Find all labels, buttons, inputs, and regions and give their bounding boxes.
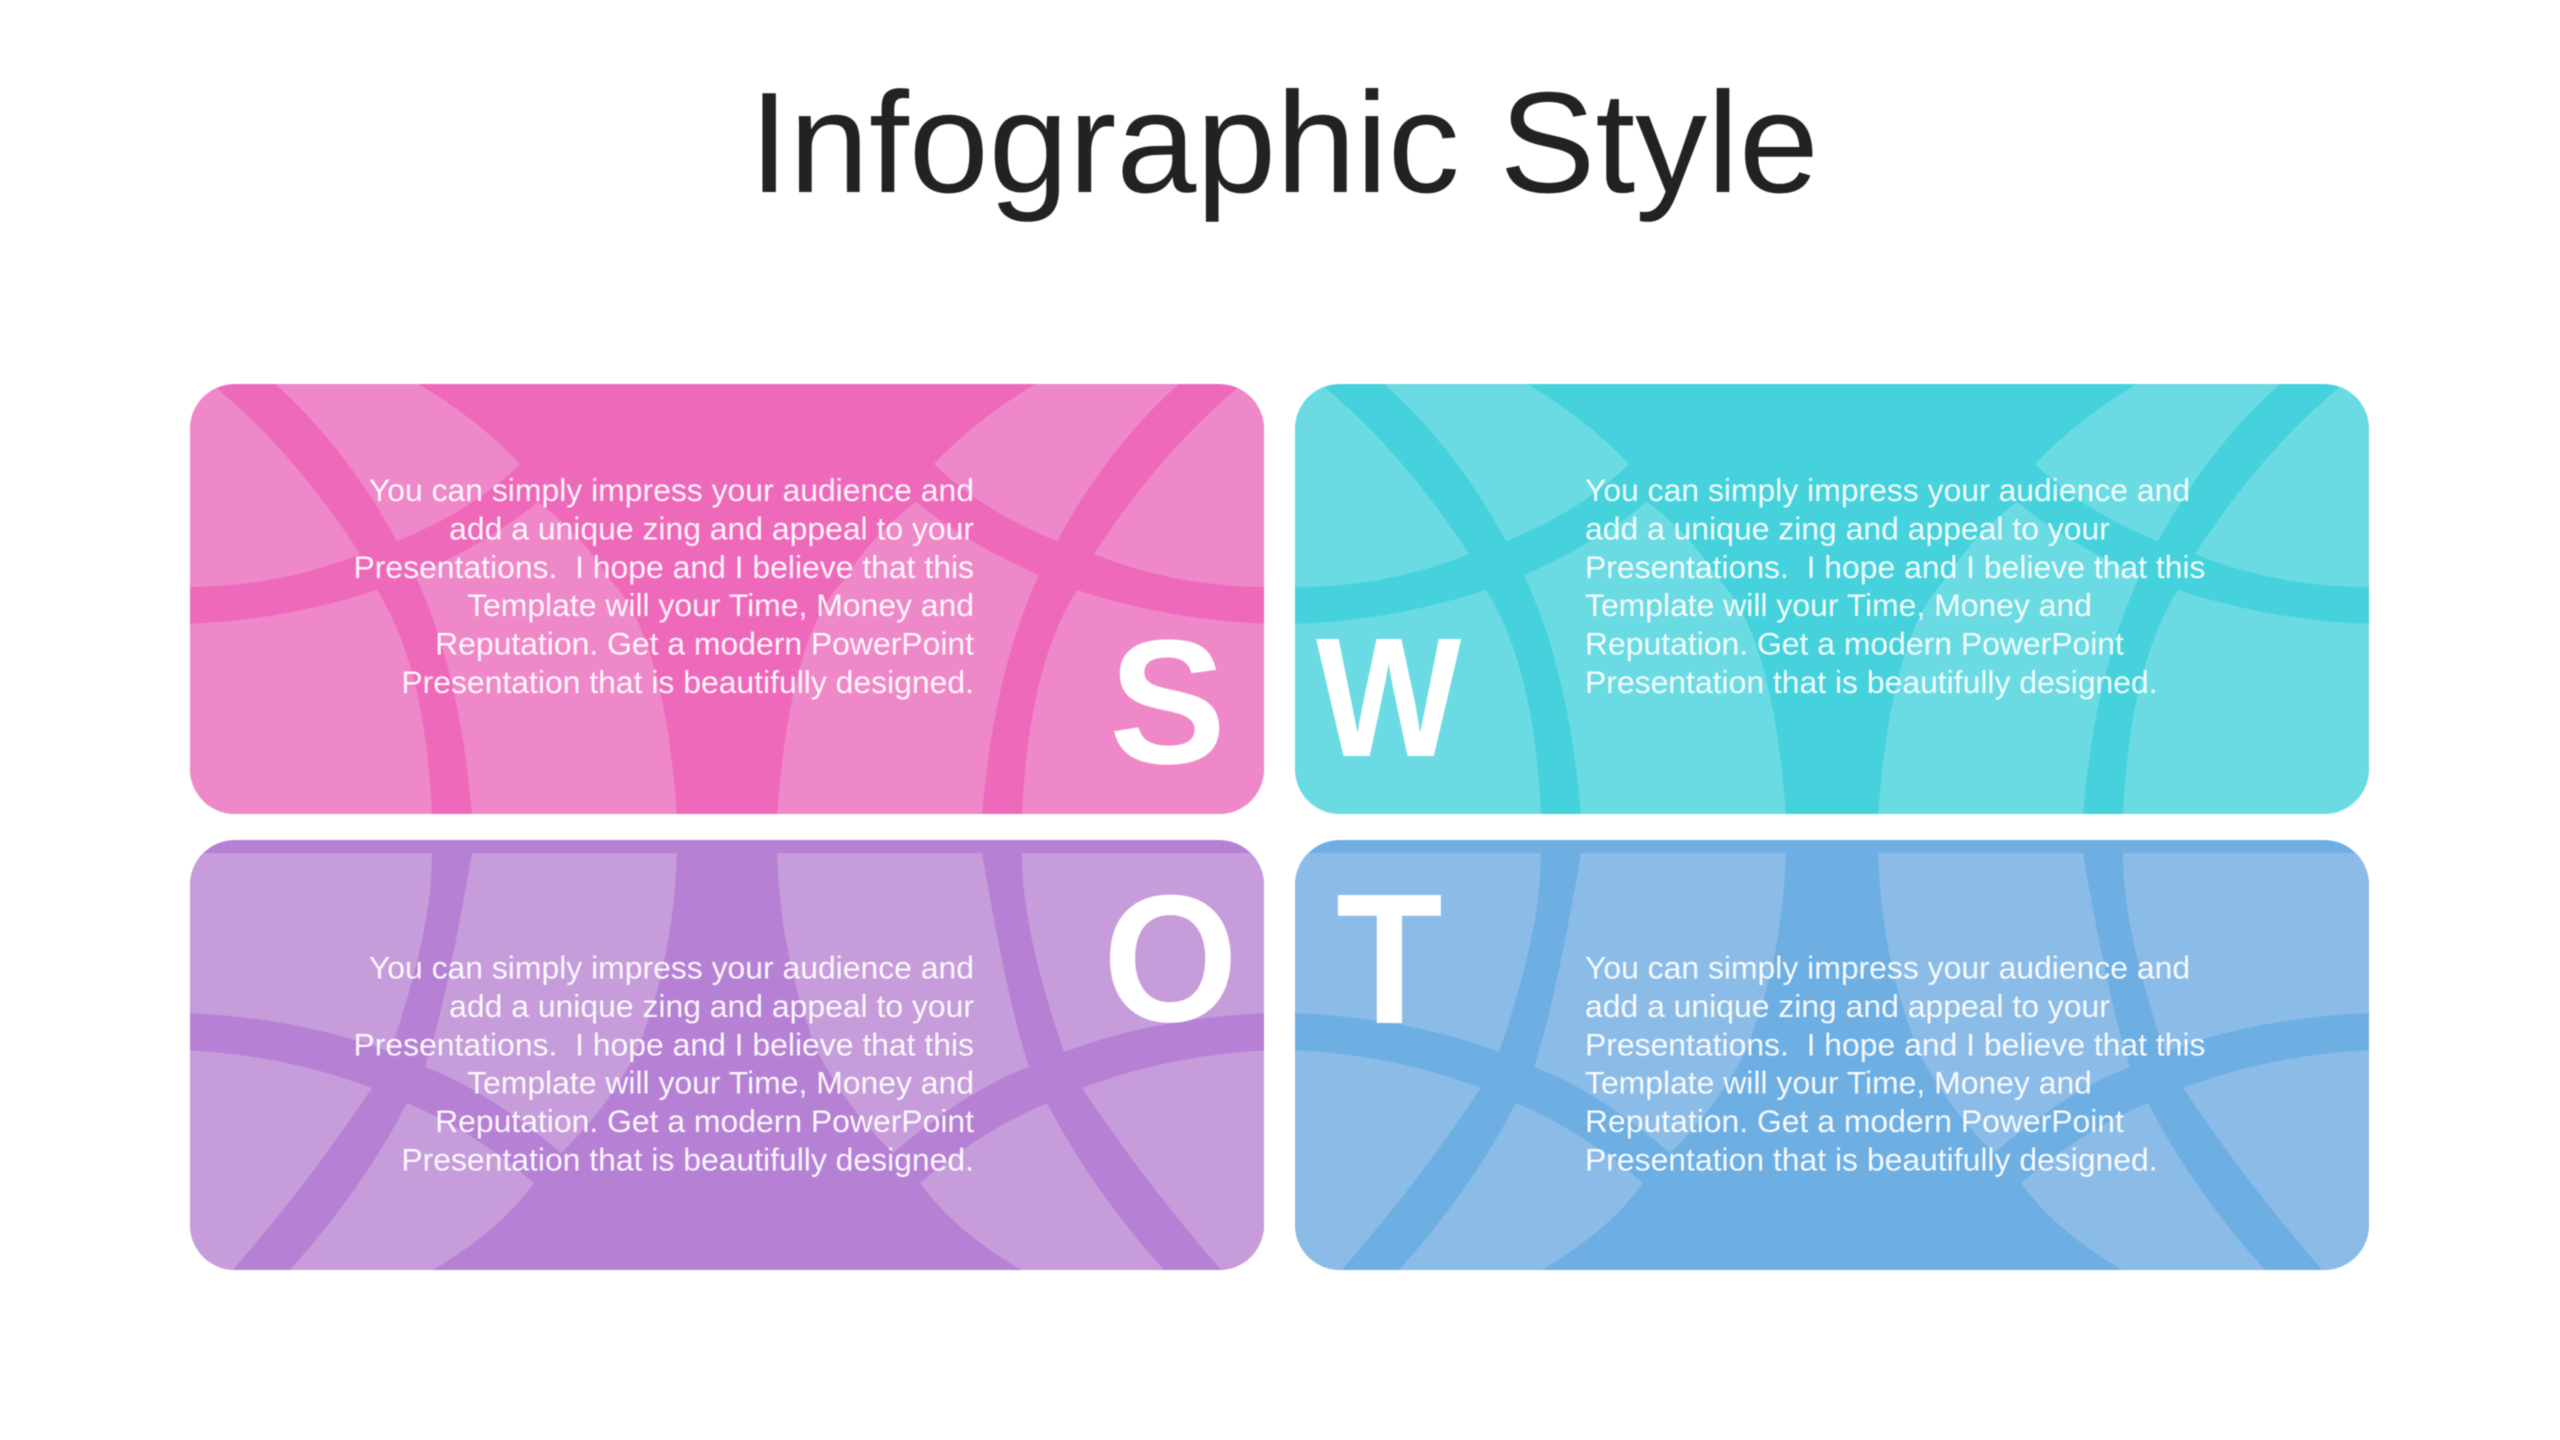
letter S: S	[1109, 604, 1226, 801]
body text T: You can simply impress your audience and	[1585, 950, 2190, 986]
panel: S strengths	[184, 382, 1270, 816]
body text S: Reputation. Get a modern PowerPoint	[435, 626, 974, 662]
body text T: add a unique zing and appeal to your	[1585, 988, 2110, 1024]
body text O: add a unique zing and appeal to your	[449, 988, 974, 1024]
body text O: Template will your Time, Money and	[467, 1065, 974, 1101]
body text S: Template will your Time, Money and	[467, 587, 974, 623]
body text S: Presentations. I hope and I believe that this	[354, 549, 974, 585]
body text O: You can simply impress your audience and	[369, 950, 974, 986]
body text T: Reputation. Get a modern PowerPoint	[1585, 1103, 2124, 1139]
letter T: T	[1336, 856, 1443, 1063]
letter O: O	[1103, 857, 1238, 1060]
body text W	[1585, 472, 2206, 700]
panel: O opportunities	[184, 840, 1270, 1272]
body text T: Presentation that is beautifully designed.	[1585, 1142, 2158, 1178]
body text T	[1585, 950, 2206, 1178]
body text O: Presentations. I hope and I believe that this	[354, 1026, 974, 1062]
title: Infographic Style	[749, 63, 1819, 223]
body text W: Template will your Time, Money and	[1585, 587, 2092, 623]
panel: W weaknesses	[1293, 382, 2371, 816]
body text T: Template will your Time, Money and	[1585, 1065, 2092, 1101]
body text O: Reputation. Get a modern PowerPoint	[435, 1103, 974, 1139]
body text O	[354, 950, 974, 1178]
body text W: Presentation that is beautifully designed.	[1585, 664, 2158, 700]
body text S: add a unique zing and appeal to your	[449, 510, 974, 546]
body text W: Presentations. I hope and I believe that this	[1585, 549, 2206, 585]
body text W: add a unique zing and appeal to your	[1585, 510, 2110, 546]
body text S: You can simply impress your audience and	[369, 472, 974, 508]
body text O: Presentation that is beautifully designed.	[401, 1142, 974, 1178]
body text S	[354, 472, 974, 700]
body text W: You can simply impress your audience and	[1585, 472, 2190, 508]
letter W: W	[1316, 603, 1461, 793]
body text T: Presentations. I hope and I believe that this	[1585, 1026, 2206, 1062]
panel: T threats	[1293, 840, 2371, 1272]
body text S: Presentation that is beautifully designed.	[401, 664, 974, 700]
body text W: Reputation. Get a modern PowerPoint	[1585, 626, 2124, 662]
